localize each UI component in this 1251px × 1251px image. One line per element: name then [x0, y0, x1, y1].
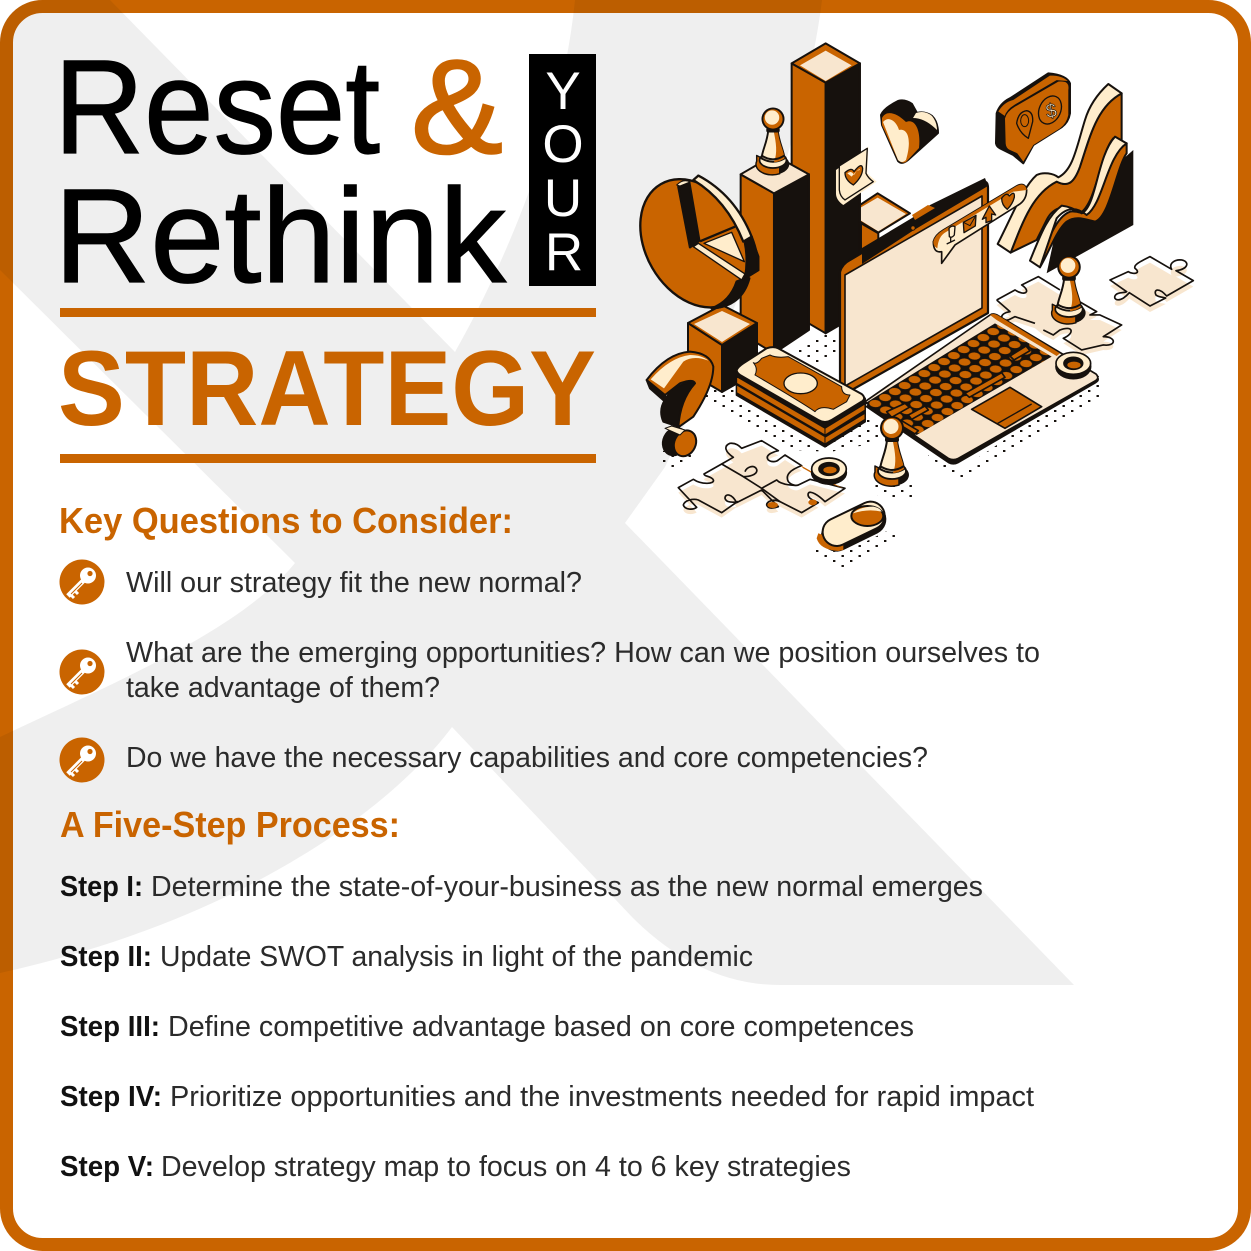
question 1: [60, 560, 582, 604]
puzzle outlines right: [997, 257, 1193, 350]
title: STRATEGY: STRATEGY: [58, 328, 596, 448]
icon: key 1: [60, 560, 104, 604]
question 2: What are the emerging opportunities? How can we position ourselves to: [126, 637, 1040, 669]
puzzle pieces left: [678, 441, 845, 518]
vertical tag: YOUR: Y: [545, 62, 581, 121]
laptop screen: [840, 178, 988, 391]
step 3: Step III:: [60, 1011, 160, 1043]
laptop base: [865, 314, 1099, 465]
question 2: [60, 637, 1040, 704]
rule top: [60, 308, 596, 317]
notification strip: [933, 185, 1027, 263]
vertical tag: YOUR: U: [544, 169, 582, 228]
middle bar: [741, 155, 809, 353]
question 3: [60, 738, 928, 782]
heading: key questions: Key Questions to Consider:: [59, 500, 513, 541]
step 2: Update SWOT analysis in light of the pandemic: [160, 941, 753, 973]
step 5: Step V:: [60, 1151, 154, 1183]
step 3: Define competitive advantage based on core competences: [168, 1011, 914, 1043]
pawn 1: [756, 107, 789, 175]
short box: [688, 305, 757, 392]
back box: [860, 193, 910, 252]
wave chart: [998, 84, 1133, 273]
question mark: [647, 352, 713, 460]
step 4: Step IV:: [60, 1081, 162, 1113]
chat bubble with pin and dollar: [996, 73, 1070, 163]
question 3: Do we have the necessary capabilities and core competencies?: [126, 742, 928, 774]
icon: 3D heart: [881, 100, 938, 163]
step 1: Determine the state-of-your-business as the new normal emerges: [151, 871, 983, 903]
heading: five-step process: A Five-Step Process:: [60, 804, 400, 845]
icon: key 3: [60, 738, 104, 782]
vertical tag: YOUR: O: [542, 115, 584, 174]
question 1: Will our strategy fit the new normal?: [126, 567, 582, 599]
icon: key 2: [60, 650, 104, 694]
money stack: [737, 347, 865, 447]
illustration: isometric strategy scene: [618, 43, 1193, 568]
step 4: Prioritize opportunities and the investments needed for rapid impact: [170, 1081, 1034, 1113]
puzzle shadow fill left: [678, 446, 845, 518]
question 2: take advantage of them?: [126, 672, 440, 704]
vertical tag: YOUR: [529, 54, 596, 286]
background watermark: [0, 0, 1074, 985]
tall bar: [792, 43, 860, 333]
chat bubble with pin and dollar: $: [1044, 100, 1059, 123]
title: ampersand: &: [411, 33, 503, 182]
pawn 2: [1052, 255, 1086, 324]
puzzle pieces right: [997, 257, 1193, 355]
ring on laptop: [1056, 352, 1091, 379]
step 5: Develop strategy map to focus on 4 to 6 key strategies: [161, 1151, 851, 1183]
vertical tag: YOUR: R: [545, 223, 583, 282]
puzzle outline left: [678, 441, 845, 513]
puzzle shadow fill right: [997, 263, 1193, 355]
ring on puzzle: [812, 458, 846, 484]
pawn 3: [874, 416, 909, 486]
step 2: Step II:: [60, 941, 152, 973]
dotted shadows: [657, 328, 1104, 568]
title: Reset: Reset: [54, 33, 380, 182]
title: Rethink: Rethink: [54, 162, 507, 311]
rule bottom: [60, 454, 596, 463]
step 1: Step I:: [60, 871, 143, 903]
toggle button: [817, 506, 883, 551]
pie chart: [618, 159, 772, 327]
post card with heart: [836, 147, 877, 205]
